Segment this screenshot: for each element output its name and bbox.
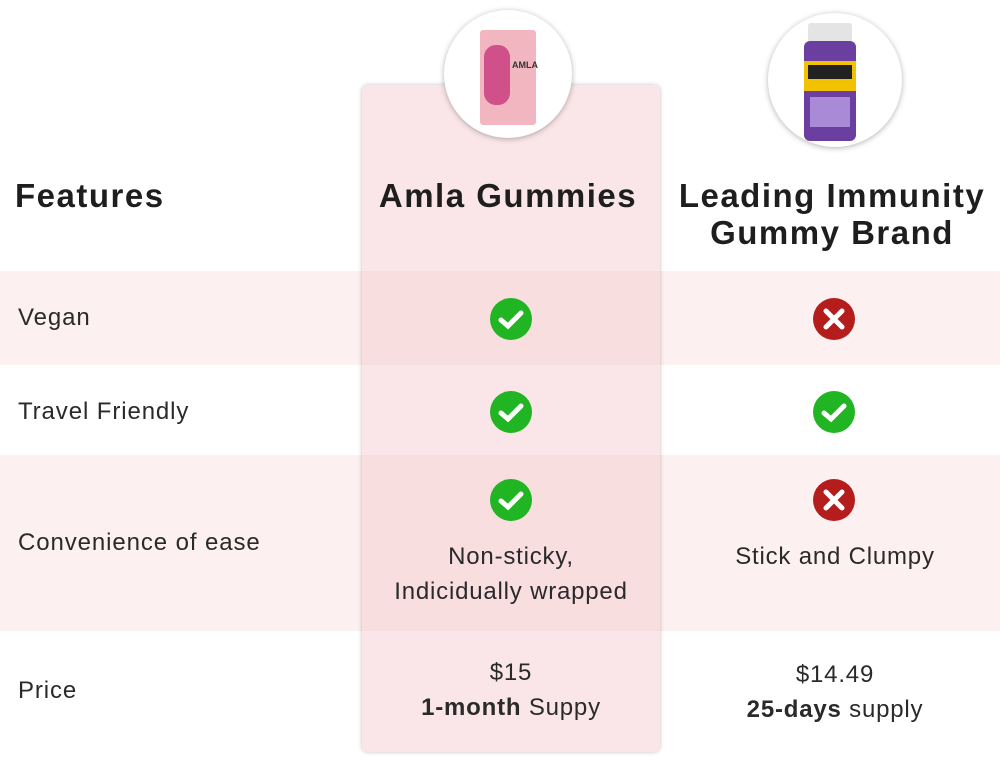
heading: features: Features bbox=[15, 177, 165, 214]
text: brand price: $14.49 bbox=[796, 661, 874, 688]
icon: competitor product bbox=[768, 13, 902, 147]
icon: check travel brand bbox=[813, 391, 855, 433]
text: amla convenience bbox=[394, 543, 628, 605]
text: amla price: $15 bbox=[490, 659, 532, 686]
icon: amla product: AMLA bbox=[512, 60, 538, 70]
text: brand convenience: Stick and Clumpy bbox=[735, 543, 935, 570]
label: vegan: Vegan bbox=[18, 304, 91, 331]
panel: amla column bbox=[362, 85, 660, 752]
icon: cross convenience bbox=[813, 479, 855, 521]
icon: amla product bbox=[444, 10, 572, 138]
heading: leading brand bbox=[679, 177, 985, 251]
text: amla price bbox=[421, 659, 601, 721]
text: brand price: 25-days supply bbox=[747, 696, 923, 723]
heading: amla gummies: Amla Gummies bbox=[379, 177, 637, 214]
label: convenience: Convenience of ease bbox=[18, 529, 261, 556]
icon: cross vegan bbox=[813, 298, 855, 340]
icon: check convenience bbox=[490, 479, 532, 521]
text: amla convenience: Indicidually wrapped bbox=[394, 578, 628, 605]
icon: check vegan bbox=[490, 298, 532, 340]
icon: check travel amla bbox=[490, 391, 532, 433]
row band: vegan bbox=[0, 271, 1000, 365]
text: amla price: 1-month Suppy bbox=[421, 694, 601, 721]
label: price: Price bbox=[18, 677, 77, 704]
heading: leading brand: Leading Immunity bbox=[679, 177, 985, 214]
text: brand price bbox=[747, 661, 923, 723]
row band: convenience bbox=[0, 455, 1000, 631]
text: amla convenience: Non-sticky, bbox=[448, 543, 574, 570]
heading: leading brand: Gummy Brand bbox=[710, 214, 954, 251]
label: travel: Travel Friendly bbox=[18, 398, 189, 425]
